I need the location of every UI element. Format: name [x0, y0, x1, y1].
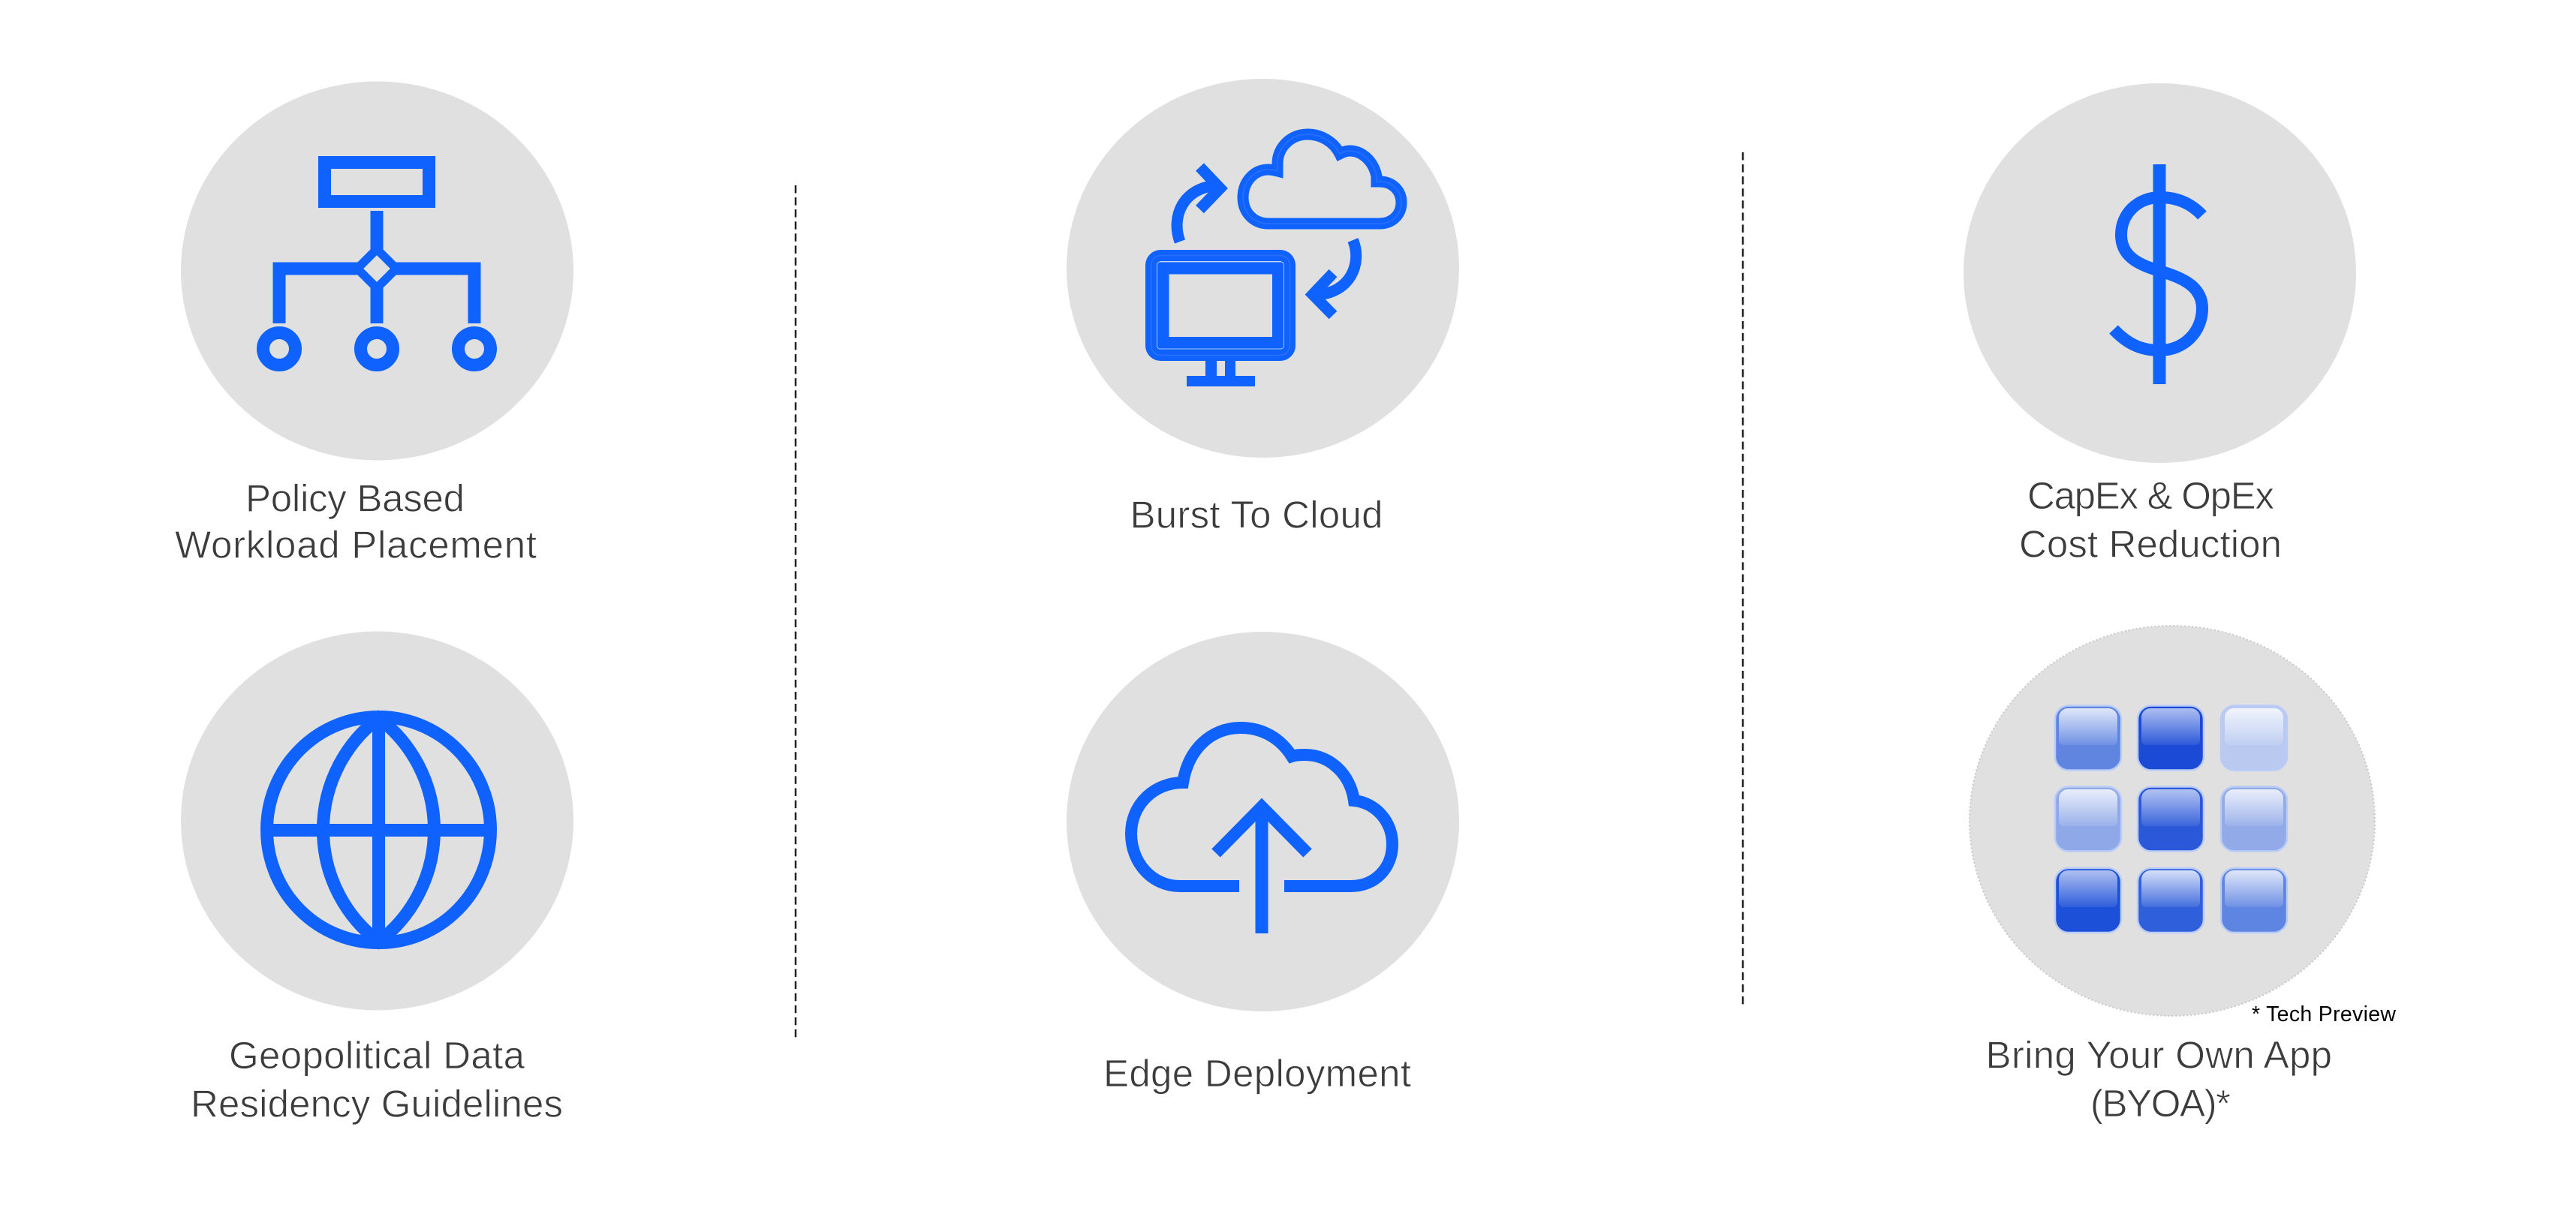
arrow: up to cloud — [1177, 167, 1220, 242]
app tile row 1 column 1 — [2055, 705, 2121, 770]
label: Bring Your Own App — [1986, 1034, 2332, 1076]
label: Burst To Cloud — [1130, 494, 1383, 536]
app tile row 3 column 3 — [2221, 868, 2287, 933]
icon: flow hierarchy — [263, 162, 491, 365]
panel: geopolitical data residency — [181, 632, 573, 1125]
circle background — [1970, 626, 2375, 1016]
panel: bring your own app — [1970, 626, 2396, 1125]
circle background — [1067, 632, 1459, 1011]
label: Residency Guidelines — [191, 1082, 563, 1125]
panel: capex and opex cost reduction — [1964, 83, 2356, 566]
label: Edge Deployment — [1103, 1052, 1411, 1095]
label — [2019, 474, 2282, 566]
circle background — [1067, 79, 1459, 458]
label: (BYOA)* — [2090, 1082, 2231, 1125]
app tile row 3 column 1 — [2055, 868, 2121, 933]
label: Policy Based — [245, 477, 465, 519]
panel: burst to cloud — [1067, 79, 1459, 536]
app tile row 2 column 1 — [2055, 786, 2121, 851]
icon: app grid — [2055, 705, 2287, 933]
label: Cost Reduction — [2019, 522, 2282, 566]
app tile row 3 column 2 — [2138, 868, 2204, 933]
panel: edge deployment — [1067, 632, 1459, 1095]
icon: globe — [267, 717, 491, 942]
app tile row 1 column 2 — [2138, 705, 2204, 770]
arrow: down to monitor — [1313, 240, 1356, 315]
label: CapEx & OpEx — [2027, 474, 2274, 517]
app tile row 2 column 2 — [2138, 786, 2204, 851]
label: Geopolitical Data — [229, 1034, 525, 1077]
label — [175, 477, 537, 566]
label: Workload Placement — [175, 524, 537, 566]
circle background — [181, 632, 573, 1010]
icon: dollar sign — [2114, 164, 2202, 384]
app tile row 1 column 3 — [2221, 705, 2287, 770]
circle background — [1964, 83, 2356, 463]
label — [1986, 1034, 2332, 1125]
monitor — [1151, 255, 1290, 386]
app tile row 2 column 3 — [2221, 786, 2287, 851]
divider: right — [1742, 152, 1744, 1005]
label — [191, 1034, 563, 1125]
cloud — [1243, 134, 1401, 224]
icon: monitor and cloud exchange — [1151, 134, 1401, 386]
icon: cloud upload — [1131, 728, 1392, 933]
panel: policy based workload placement — [175, 81, 573, 566]
footnote: tech preview: * Tech Preview — [2252, 1002, 2396, 1026]
circle background — [181, 81, 573, 461]
divider: left — [795, 185, 796, 1038]
